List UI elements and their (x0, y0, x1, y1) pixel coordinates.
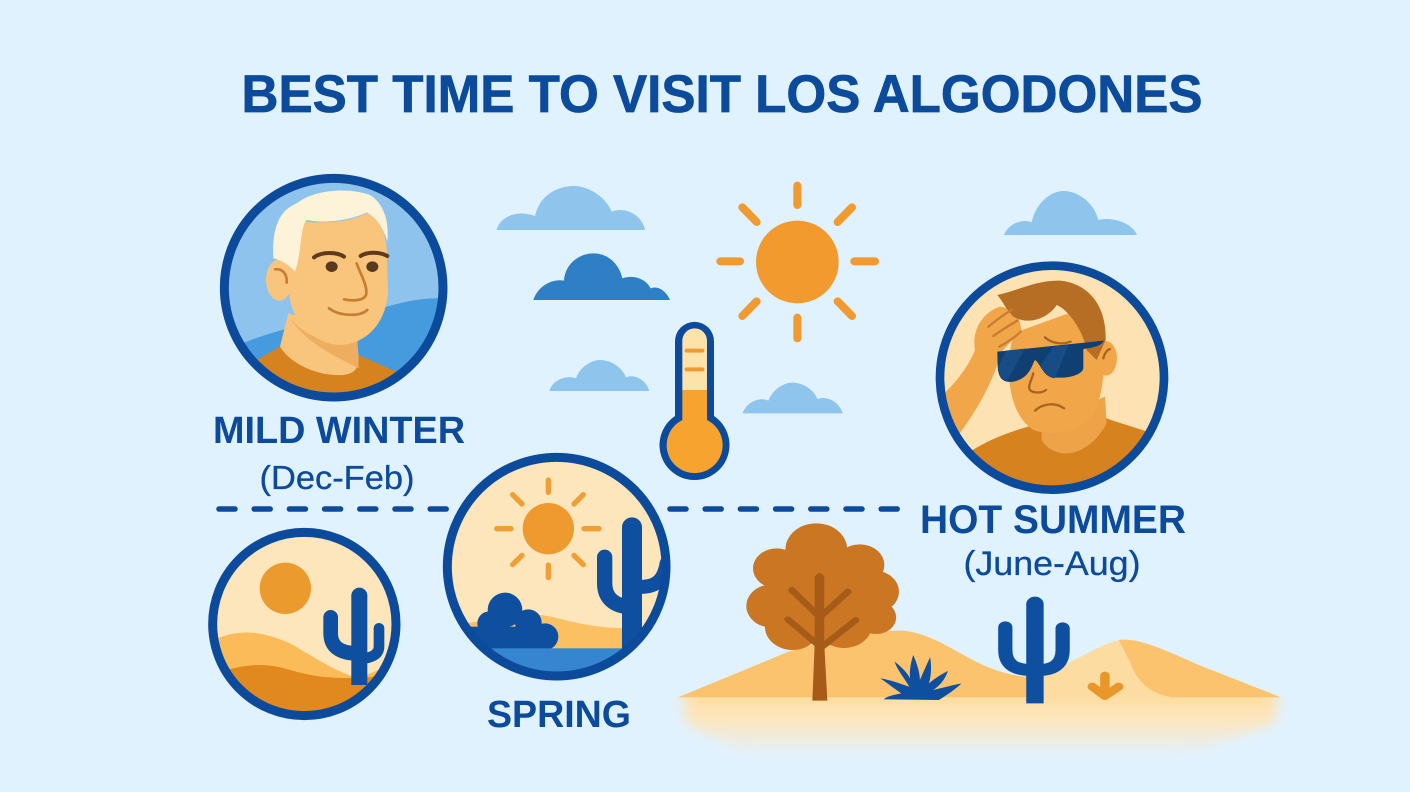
cactus (331, 592, 379, 685)
dune (468, 614, 622, 648)
water (491, 648, 622, 672)
back dune (218, 632, 379, 678)
panel: desert with sun and cactus (213, 532, 400, 723)
icon: small right cloud (743, 383, 843, 413)
icon: dark cloud (533, 253, 670, 300)
icon: large light cloud (497, 186, 645, 230)
shirt (972, 418, 1146, 486)
icon: small left cloud (549, 360, 649, 391)
icon: top right cloud (1004, 191, 1137, 235)
icon: tree (746, 523, 899, 701)
label: spring: SPRING (487, 694, 631, 736)
icon: large cactus (1005, 600, 1063, 703)
face (1008, 307, 1104, 433)
ear (1103, 341, 1117, 376)
hair (997, 281, 1106, 360)
panel: mild winter portrait (224, 178, 443, 403)
right dune (1119, 640, 1281, 697)
label: june-aug: (June-Aug) (964, 545, 1140, 583)
white hair (273, 190, 388, 272)
infographic canvas (208, 74, 1286, 752)
sunglasses (997, 341, 1104, 382)
bush (470, 592, 558, 648)
panel: hot summer portrait (940, 266, 1164, 493)
neck (1042, 397, 1107, 453)
neck shadow (289, 316, 359, 368)
icon: agave plant (880, 655, 961, 700)
label: mild winter: MILD WINTER (213, 410, 465, 452)
sun (497, 480, 599, 578)
neck (280, 313, 358, 375)
sandy ground (675, 698, 1286, 752)
panel: desert landscape (678, 523, 1281, 757)
label: dec-feb: (Dec-Feb) (260, 459, 414, 496)
middle pale dune (1028, 640, 1184, 698)
face features (275, 253, 387, 315)
cactus (605, 522, 667, 663)
icon: clouds and sun group (497, 186, 1137, 480)
ear (266, 259, 293, 301)
sun (260, 563, 311, 614)
title: BEST TIME TO VISIT LOS ALGODONES (242, 65, 1202, 124)
panel: spring scene (447, 457, 667, 682)
icon: thermometer (659, 322, 729, 480)
left dune (678, 631, 1028, 697)
icon: sun (720, 186, 875, 338)
face lines and fingers (988, 310, 1110, 411)
face (288, 213, 388, 345)
hill behind man (244, 298, 438, 372)
label: hot summer: HOT SUMMER (920, 498, 1186, 542)
divider: dashed line right (670, 506, 900, 512)
divider: dashed line left (219, 506, 447, 512)
arm (940, 307, 1022, 437)
front dune (230, 665, 374, 712)
shirt (257, 346, 396, 392)
icon: small orange plant (1092, 676, 1119, 696)
